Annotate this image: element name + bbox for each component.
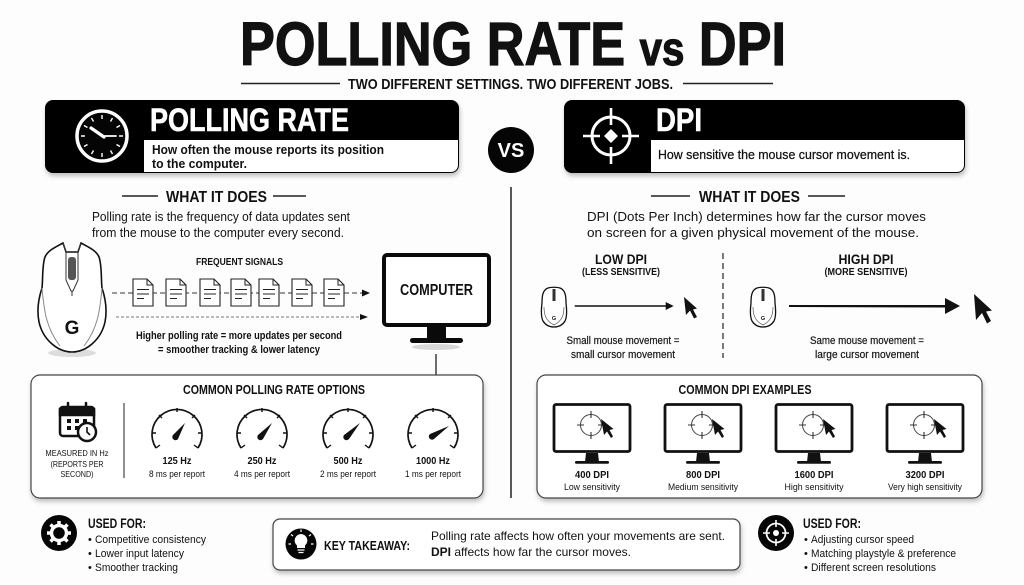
text: dpi explanation: DPI (Dots Per Inch) determines how far the cursor moves	[587, 209, 926, 224]
heading: high dpi: (MORE SENSITIVE)	[824, 267, 908, 278]
gauge: 1000 Hz: 1000 Hz	[416, 455, 450, 467]
center divider	[510, 187, 512, 498]
icon: large cursor	[974, 294, 992, 324]
icon: gear	[41, 515, 77, 551]
text: high dpi result	[810, 335, 924, 361]
list: polling rate uses: •	[88, 548, 92, 560]
monitor: 1600 DPI: 1600 DPI	[794, 469, 834, 481]
text: low dpi result: small cursor movement	[571, 349, 675, 361]
monitor: 800 DPI: 800 DPI	[686, 469, 720, 481]
text: measured in hz: MEASURED IN Hz	[46, 448, 108, 458]
panel: polling rate header	[45, 100, 459, 173]
signal arrows with documents	[112, 279, 370, 320]
list: dpi uses: Different screen resolutions	[811, 562, 936, 574]
gauge: 500 Hz	[320, 408, 376, 479]
monitor: 400 DPI: Low sensitivity	[564, 482, 620, 492]
heading: used for: USED FOR:	[88, 516, 146, 531]
list: dpi uses: Adjusting cursor speed	[811, 534, 914, 546]
monitor: 400 DPI: 400 DPI	[575, 469, 609, 481]
text: measured in hz	[46, 448, 108, 479]
label: frequent signals: FREQUENT SIGNALS	[196, 257, 283, 268]
list: dpi uses: •	[804, 562, 808, 574]
list: polling rate uses: Smoother tracking	[95, 562, 178, 574]
icon: clock	[77, 111, 127, 161]
list: polling rate uses: Lower input latency	[95, 548, 184, 560]
dashed divider	[722, 253, 724, 358]
heading: low dpi: LOW DPI	[595, 252, 647, 267]
text: key takeaway: DPI affects how far the cursor moves.	[431, 545, 631, 559]
icon: mouse: G	[65, 318, 79, 339]
title: POLLING RATE vs DPI	[240, 10, 786, 78]
monitor: 800 DPI	[665, 404, 741, 492]
gauge: 1000 Hz: 1 ms per report	[405, 469, 461, 479]
text: polling rate definition: to the computer.	[152, 156, 247, 171]
heading: used for: USED FOR:	[803, 516, 861, 531]
heading: low dpi: (LESS SENSITIVE)	[582, 267, 660, 278]
label: key takeaway: KEY TAKEAWAY:	[324, 538, 410, 553]
heading: dpi examples: COMMON DPI EXAMPLES	[678, 382, 812, 397]
icon: mouse	[38, 243, 106, 357]
text: key takeaway	[431, 529, 725, 559]
icon: calendar with clock	[60, 403, 96, 441]
text: polling rate explanation: Polling rate is the frequency of data updates sent	[92, 209, 350, 224]
list: dpi uses: •	[804, 534, 808, 546]
gauge: 125 Hz: 8 ms per report	[149, 469, 205, 479]
monitor: 800 DPI: Medium sensitivity	[668, 482, 738, 492]
gauge: 1000 Hz	[405, 408, 461, 479]
text: polling rate benefit: Higher polling rate = more updates per second	[136, 330, 342, 342]
heading: polling options: COMMON POLLING RATE OPTIONS	[183, 382, 365, 397]
text: polling rate explanation	[92, 209, 350, 240]
list: dpi uses: •	[804, 548, 808, 560]
icon: target	[758, 515, 794, 551]
panel: common dpi examples	[537, 375, 982, 498]
gauge: 250 Hz	[234, 408, 290, 479]
monitor: 3200 DPI: Very high sensitivity	[888, 482, 962, 492]
icon: computer	[384, 255, 489, 375]
panel: dpi header	[564, 100, 965, 173]
list: polling rate uses: •	[88, 534, 92, 546]
heading: high dpi: HIGH DPI	[838, 252, 894, 267]
icon: computer: COMPUTER	[400, 282, 473, 299]
used for: dpi	[758, 515, 956, 574]
text: polling rate benefit	[136, 330, 342, 356]
text: dpi explanation	[587, 209, 926, 240]
high dpi column	[750, 252, 992, 361]
icon: small mouse	[541, 287, 567, 327]
monitor: 3200 DPI: 3200 DPI	[906, 469, 945, 481]
text: polling rate definition	[152, 142, 384, 171]
callout: key takeaway	[273, 519, 740, 570]
text: low dpi result: Small mouse movement =	[566, 335, 680, 347]
icon: small mouse	[750, 287, 776, 327]
text: low dpi result	[566, 335, 680, 361]
gauge: 125 Hz	[149, 408, 205, 479]
icon: light bulb	[286, 528, 316, 560]
text: polling rate explanation: from the mouse to the computer every second.	[92, 225, 344, 240]
monitor: 400 DPI	[554, 404, 630, 492]
panel: common polling rate options	[31, 375, 483, 498]
gauge: 125 Hz: 125 Hz	[162, 455, 192, 467]
icon: crosshair	[583, 108, 639, 164]
heading: dpi: DPI	[656, 102, 702, 138]
monitor: 3200 DPI	[887, 404, 963, 492]
vs badge: VS	[498, 140, 524, 162]
text: polling rate definition: How often the mouse reports its position	[152, 142, 384, 157]
heading: high dpi	[824, 252, 908, 278]
text: measured in hz: SECOND)	[60, 469, 94, 479]
gauge: 500 Hz: 2 ms per report	[320, 469, 376, 479]
gauge: 500 Hz: 500 Hz	[334, 455, 362, 467]
list: dpi uses: Matching playstyle & preference	[811, 548, 956, 560]
arrow: large movement	[789, 298, 960, 314]
text: high dpi result: Same mouse movement =	[810, 335, 924, 347]
gauge: 250 Hz: 250 Hz	[248, 455, 276, 467]
heading: what it does (polling): WHAT IT DOES	[166, 189, 267, 206]
text: dpi definition: How sensitive the mouse cursor movement is.	[658, 147, 910, 162]
list: polling rate uses: •	[88, 562, 92, 574]
heading: polling rate: POLLING RATE	[150, 102, 349, 138]
low dpi column	[541, 252, 697, 361]
icon: small cursor	[684, 297, 697, 318]
list: polling rate uses: Competitive consistency	[95, 534, 206, 546]
list: polling rate uses	[88, 534, 206, 574]
heading: low dpi	[582, 252, 660, 278]
monitor: 1600 DPI	[776, 404, 852, 492]
vs badge	[488, 127, 534, 173]
text: measured in hz: (REPORTS PER	[50, 459, 104, 469]
text: polling rate benefit: = smoother tracking & lower latency	[158, 344, 321, 356]
subtitle: TWO DIFFERENT SETTINGS. TWO DIFFERENT JOBS.	[348, 76, 673, 93]
arrow: small movement	[575, 302, 673, 310]
heading: what it does (dpi): WHAT IT DOES	[699, 189, 800, 206]
text: high dpi result: large cursor movement	[815, 349, 919, 361]
monitor: 1600 DPI: High sensitivity	[784, 482, 844, 492]
list: dpi uses	[804, 534, 956, 574]
used for: polling rate	[41, 515, 206, 574]
text: dpi explanation: on screen for a given physical movement of the mouse.	[587, 225, 919, 240]
gauge: 250 Hz: 4 ms per report	[234, 469, 290, 479]
text: key takeaway: Polling rate affects how often your movements are sent.	[431, 529, 725, 543]
